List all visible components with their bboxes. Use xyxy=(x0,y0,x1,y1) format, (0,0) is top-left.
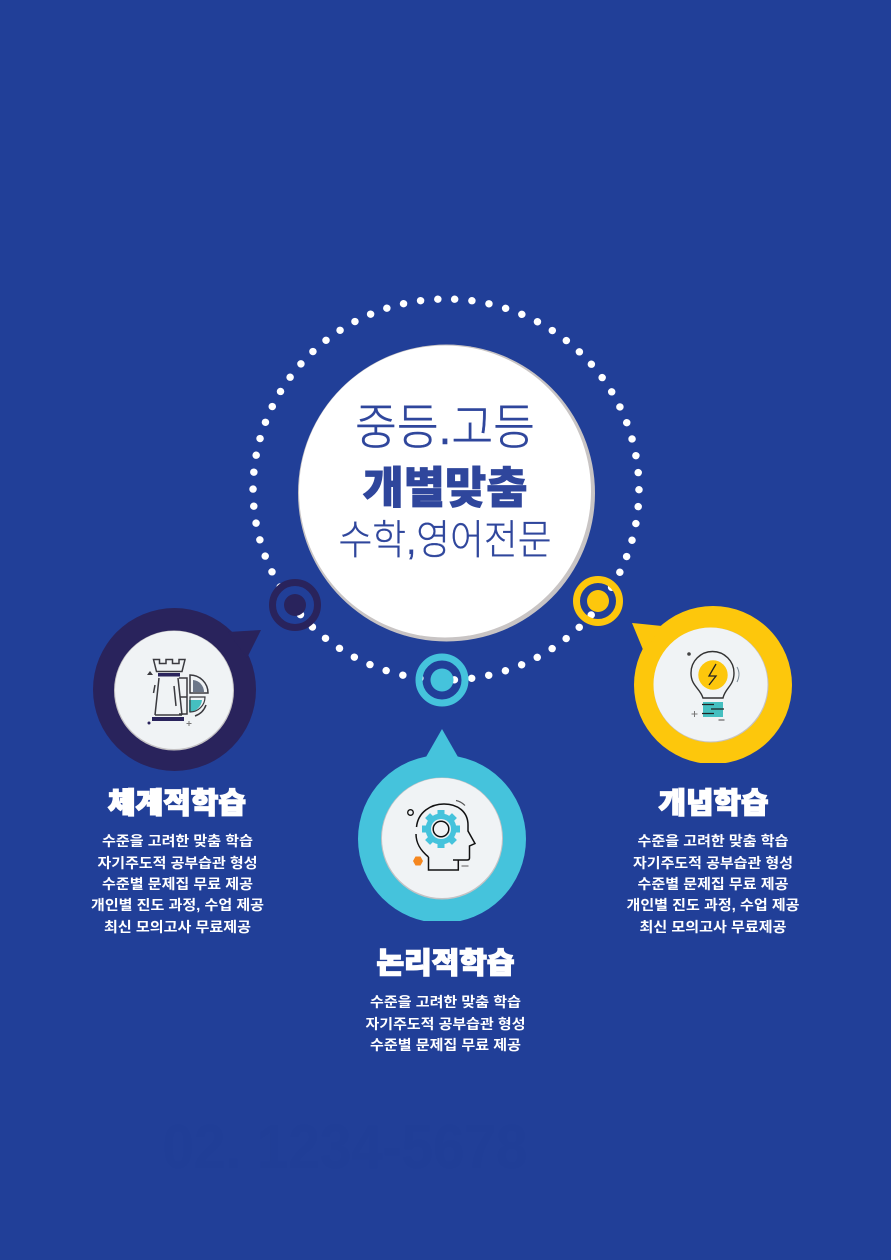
text block: right: 수준별 문제집 무료 제공 xyxy=(638,876,789,892)
text block: left: 수준을 고려한 맞춤 학습 xyxy=(102,833,253,849)
text block: center: 수준을 고려한 맞춤 학습 xyxy=(370,994,521,1010)
text block: left: 자기주도적 공부습관 형성 xyxy=(98,855,258,871)
bubble: navy with chess icon xyxy=(93,608,261,771)
bubble: cyan with head icon xyxy=(358,729,526,923)
heading: center: 논리적학습 xyxy=(376,947,514,980)
text block: center: 자기주도적 공부습관 형성 xyxy=(366,1016,526,1032)
text block: right xyxy=(626,833,800,935)
text block: center: 수준별 문제집 무료 제공 xyxy=(370,1037,521,1053)
central title: 개별맞춤 xyxy=(362,464,528,513)
faint phone number watermark: 02. 1234-5678 xyxy=(162,1113,528,1182)
text block: left xyxy=(91,833,264,935)
text block: center xyxy=(366,994,526,1053)
text block: right: 수준을 고려한 맞춤 학습 xyxy=(638,833,789,849)
text block: left: 개인별 진도 과정, 수업 제공 xyxy=(91,897,264,913)
heading: left: 체계적학습 xyxy=(108,787,246,820)
icon: rook and pie xyxy=(147,660,208,726)
central title xyxy=(338,401,552,563)
heading: right: 개념학습 xyxy=(658,787,768,820)
icon: light bulb xyxy=(687,652,739,720)
connector ring: navy xyxy=(272,582,318,628)
text block: left: 수준별 문제집 무료 제공 xyxy=(102,876,253,892)
icon: head with gear xyxy=(408,800,475,870)
connector ring: cyan xyxy=(419,657,465,703)
text block: right: 최신 모의고사 무료제공 xyxy=(640,919,787,935)
central title: 중등.고등 xyxy=(355,401,535,455)
text block: right: 자기주도적 공부습관 형성 xyxy=(633,855,793,871)
infographic canvas xyxy=(92,296,799,1052)
central title: 수학,영어전문 xyxy=(338,517,552,563)
text block: left: 최신 모의고사 무료제공 xyxy=(104,919,251,935)
central white circle xyxy=(298,344,595,642)
connector ring: yellow xyxy=(576,580,620,622)
text block: right: 개인별 진도 과정, 수업 제공 xyxy=(626,897,800,913)
dotted orbit ring xyxy=(245,291,647,688)
bubble: yellow with bulb icon xyxy=(632,606,792,764)
